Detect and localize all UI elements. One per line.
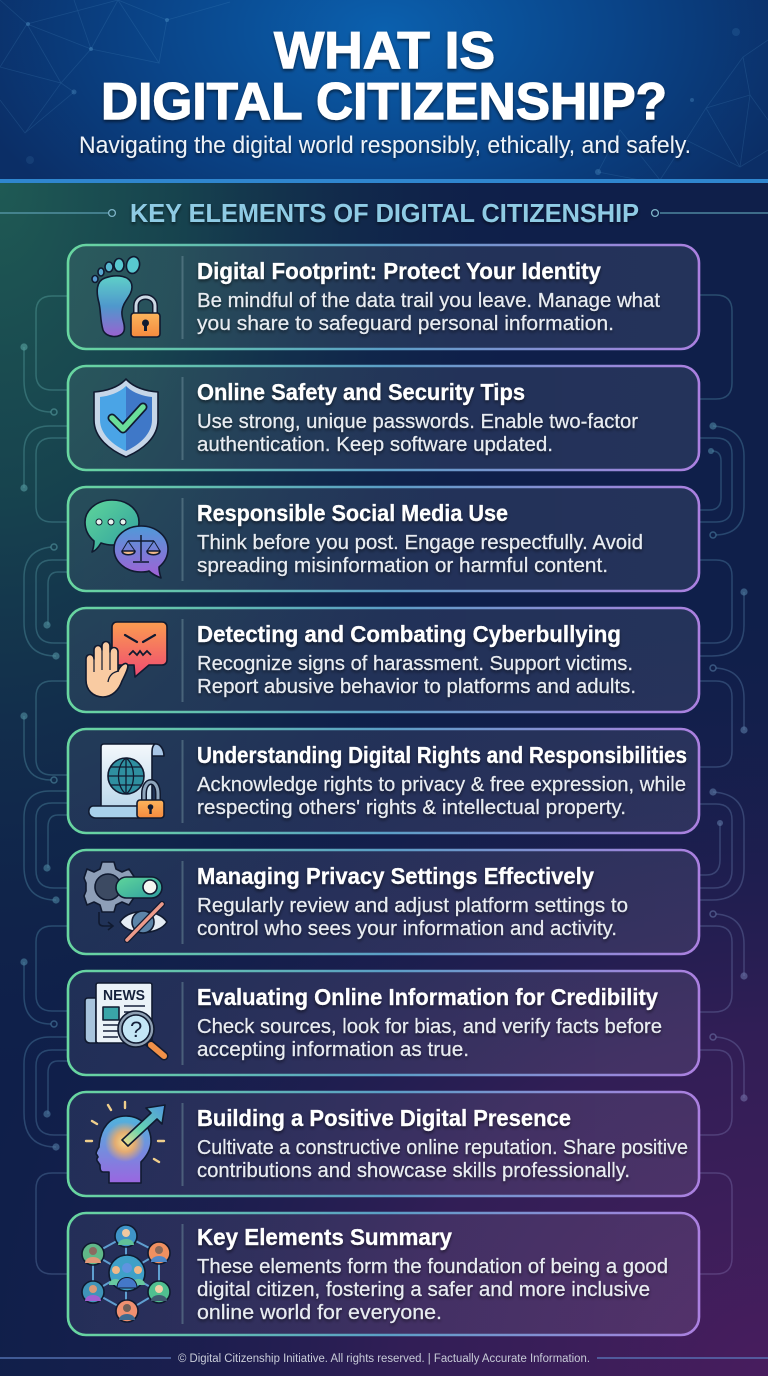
heading and text: [197, 379, 638, 456]
icon: newspaper and magnifier: ?: [130, 1017, 142, 1042]
heading and text: Online Safety and Security Tips: [197, 379, 525, 405]
title: DIGITAL CITIZENSHIP?: [101, 73, 667, 131]
heading and text: Key Elements Summary: [197, 1224, 452, 1250]
heading and text: Cultivate a constructive online reputation. Share positive: [197, 1136, 688, 1159]
heading and text: Check sources, look for bias, and verify facts before: [197, 1015, 662, 1038]
heading and text: [197, 1224, 668, 1324]
heading and text: respecting others' rights & intellectual property.: [197, 796, 626, 819]
circuit traces left: [20, 296, 68, 1274]
heading and text: [197, 742, 687, 819]
heading and text: [197, 1105, 688, 1182]
footer: © Digital Citizenship Initiative. All rights reserved. | Factually Accurate Information.: [178, 1353, 590, 1365]
panel: cyberbullying: [68, 608, 699, 712]
heading and text: Acknowledge rights to privacy & free expression, while: [197, 773, 686, 796]
heading and text: [197, 984, 662, 1061]
section heading: KEY ELEMENTS OF DIGITAL CITIZENSHIP: [130, 200, 639, 228]
heading and text: online world for everyone.: [197, 1301, 442, 1324]
heading and text: you share to safeguard personal information.: [197, 312, 614, 335]
panel: evaluating information: [68, 971, 699, 1075]
heading and text: digital citizen, fostering a safer and more inclusive: [197, 1278, 650, 1301]
heading and text: Detecting and Combating Cyberbullying: [197, 621, 621, 647]
panel: digital footprint: [68, 245, 699, 349]
icon: head with rising arrow: [86, 1102, 165, 1183]
heading and text: Responsible Social Media Use: [197, 500, 508, 526]
section heading: [0, 200, 768, 228]
icon: stop hand and angry bubble: [86, 622, 167, 697]
icon: document, globe and lock: [89, 744, 164, 818]
icon: gear, toggle and crossed eye: [84, 862, 167, 940]
title: WHAT IS: [274, 22, 495, 80]
heading and text: [197, 500, 643, 577]
header band: [0, 0, 768, 183]
heading and text: [197, 863, 628, 940]
heading and text: Think before you post. Engage respectfully. Avoid: [197, 531, 643, 554]
icon: chat bubbles and scales: [85, 500, 168, 578]
heading and text: authentication. Keep software updated.: [197, 433, 553, 456]
icon: shield with check: [94, 379, 158, 457]
heading and text: Use strong, unique passwords. Enable two-factor: [197, 410, 638, 433]
icon: people network: [82, 1225, 170, 1322]
heading and text: Recognize signs of harassment. Support victims.: [197, 652, 633, 675]
icon: footprint and lock: [92, 255, 160, 337]
panel: privacy settings: [68, 850, 699, 954]
heading and text: Managing Privacy Settings Effectively: [197, 863, 594, 889]
heading and text: control who sees your information and activity.: [197, 917, 617, 940]
panel: positive presence: [68, 1092, 699, 1196]
panel: online safety: [68, 366, 699, 470]
heading and text: Understanding Digital Rights and Responsibilities: [197, 742, 687, 768]
heading and text: contributions and showcase skills professionally.: [197, 1159, 630, 1182]
heading and text: [197, 258, 660, 335]
heading and text: Building a Positive Digital Presence: [197, 1105, 571, 1131]
panel: social media: [68, 487, 699, 591]
title: [101, 22, 667, 131]
heading and text: [197, 621, 636, 698]
heading and text: accepting information as true.: [197, 1038, 469, 1061]
heading and text: Be mindful of the data trail you leave. Manage what: [197, 289, 660, 312]
icon: newspaper and magnifier: [85, 983, 164, 1056]
subtitle: Navigating the digital world responsibly, ethically, and safely.: [79, 132, 691, 159]
heading and text: Report abusive behavior to platforms and adults.: [197, 675, 636, 698]
heading and text: spreading misinformation or harmful content.: [197, 554, 608, 577]
circuit traces right: [700, 295, 748, 1274]
heading and text: Digital Footprint: Protect Your Identity: [197, 258, 601, 284]
heading and text: These elements form the foundation of being a good: [197, 1255, 668, 1278]
panel: digital rights: [68, 729, 699, 833]
heading and text: Evaluating Online Information for Credibility: [197, 984, 658, 1010]
heading and text: Regularly review and adjust platform settings to: [197, 894, 628, 917]
icon: newspaper and magnifier: NEWS: [103, 987, 145, 1004]
panel: summary: [68, 1213, 699, 1335]
